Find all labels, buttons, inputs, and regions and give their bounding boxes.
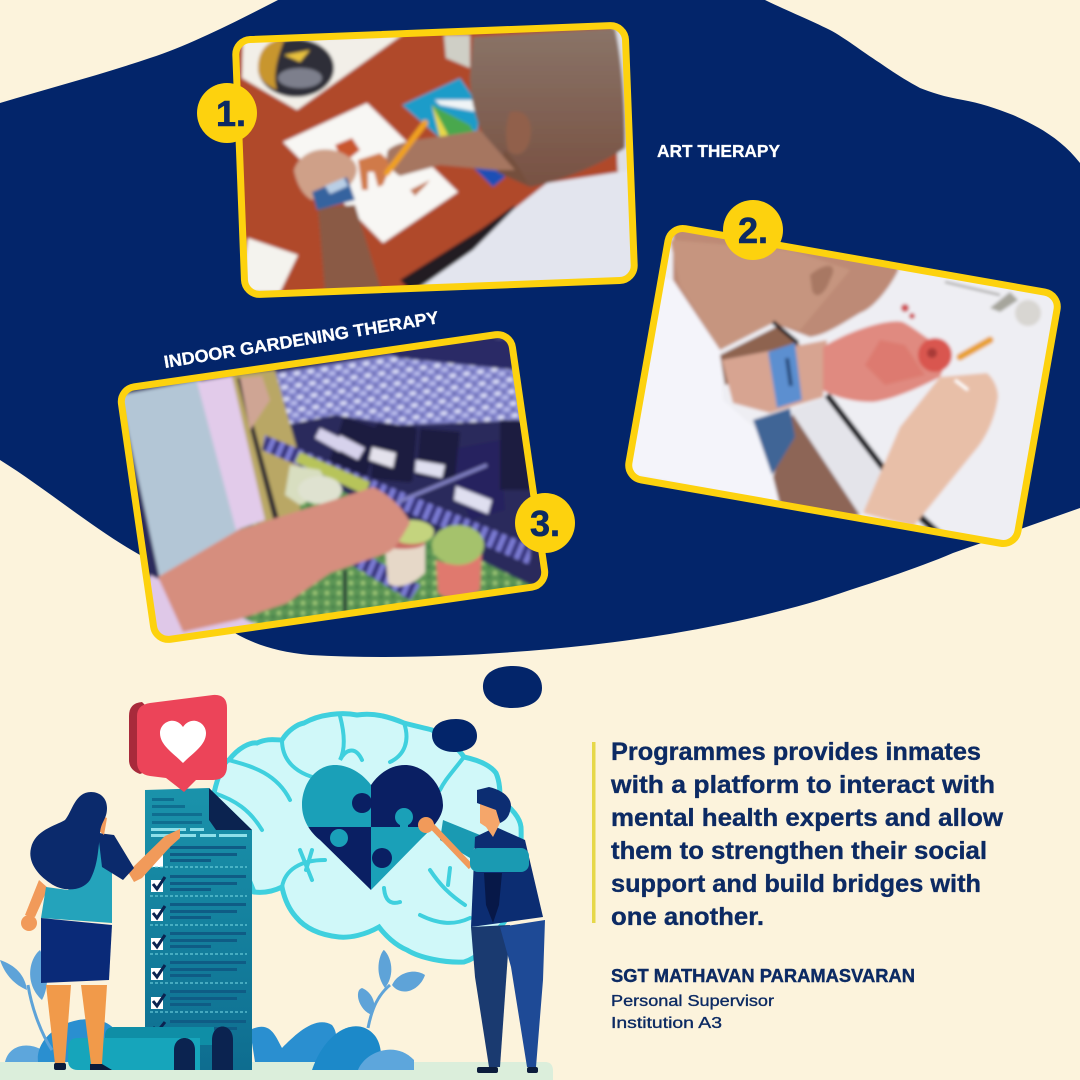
- panel: photo 2 clay modelling: [625, 225, 1061, 547]
- quote text block: [610, 738, 1004, 931]
- accent bar: [592, 742, 596, 923]
- badge number 3: 3.: [530, 503, 560, 544]
- badge number 1: 1.: [216, 93, 246, 134]
- quote text block: Programmes provides inmates: [611, 738, 981, 766]
- label: art therapy: ART THERAPY: [657, 141, 780, 161]
- badge number 2: 2.: [738, 210, 768, 251]
- illustration: man: [418, 787, 545, 1073]
- quote text block: one another.: [611, 903, 764, 931]
- illustration: puzzle heart: [300, 760, 446, 892]
- attribution: [611, 966, 915, 1032]
- thought bubble large: [483, 666, 542, 708]
- attribution: Institution A3: [611, 1015, 722, 1032]
- quote text block: them to strengthen their social: [611, 837, 987, 865]
- badge number 3: [515, 493, 575, 553]
- illustration: brain: [214, 714, 521, 962]
- ground band: [0, 1062, 553, 1080]
- attribution: Personal Supervisor: [611, 993, 775, 1010]
- illustration: checklist document: [68, 788, 252, 1070]
- panel: photo 1 art therapy: [230, 15, 645, 305]
- illustration: plants and bushes: [0, 950, 425, 1070]
- quote text block: support and build bridges with: [611, 870, 981, 898]
- quote text block: mental health experts and allow: [611, 804, 1004, 832]
- label: indoor gardening therapy: INDOOR GARDENING THERAPY: [162, 307, 440, 372]
- panel: photo 3 indoor gardening: [110, 325, 555, 650]
- quote text block: with a platform to interact with: [610, 771, 995, 799]
- navy background blob: [0, 0, 1080, 657]
- illustration: woman: [21, 792, 180, 1070]
- badge number 1: [197, 83, 257, 143]
- badge number 2: [723, 200, 783, 260]
- attribution: SGT MATHAVAN PARAMASVARAN: [611, 966, 915, 986]
- icon: heart like notification: [129, 695, 227, 792]
- thought bubble small: [432, 719, 477, 752]
